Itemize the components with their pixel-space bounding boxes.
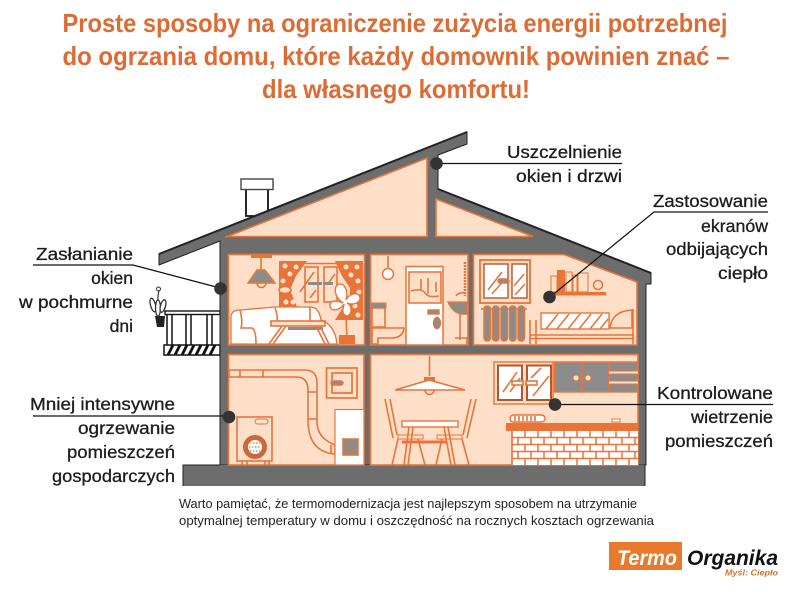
callout: Kontrolowane wietrzenie: pomieszczeń: [665, 431, 773, 451]
callout: Mniej intensywne: gospodarczych: [52, 466, 175, 486]
logo: TermoOrganika: [609, 542, 778, 578]
house shell: [159, 132, 651, 486]
icon: sink: [448, 262, 467, 345]
title: dla własnego komfortu!: [262, 74, 530, 104]
panel: attic right: [436, 199, 533, 236]
icon: pendant lamp: [395, 356, 465, 394]
icon: wall vent: [326, 368, 357, 398]
callout: Mniej intensywne: ogrzewanie: [78, 418, 175, 438]
callout: Zastosowanie ekranów: ciepło: [718, 263, 768, 283]
icon: radiator: [481, 306, 527, 341]
icon: bedroom window: [480, 260, 530, 303]
callout: Kontrolowane wietrzenie: Kontrolowane: [657, 383, 773, 403]
title: [62, 8, 730, 104]
callout: Mniej intensywne: Mniej intensywne: [30, 394, 175, 414]
logo: TermoOrganika: Myśl: Ciepło: [725, 568, 778, 578]
icon: balcony with plant: [149, 287, 220, 355]
callout: Kontrolowane wietrzenie: [549, 383, 773, 451]
callout: Zastosowanie ekranów: [543, 191, 768, 303]
panel: bathroom: [370, 254, 468, 345]
icon: kitchen cabinets: [554, 362, 638, 392]
icon: sofa: [231, 307, 337, 344]
callout: Zasłanianie okien: w pochmurne: [18, 292, 133, 312]
icon: ceiling lamp: [248, 256, 275, 288]
icon: ventilation duct: [229, 370, 335, 454]
icon: kitchen window: [494, 362, 553, 404]
title: do ogrzania domu, które każdy domownik powinien znać –: [62, 41, 730, 71]
callout: Uszczelnienie: [430, 142, 622, 186]
callout: Kontrolowane wietrzenie: wietrzenie: [690, 407, 773, 427]
icon: boiler cabinet: [335, 410, 364, 465]
icon: heat pump: [237, 417, 272, 465]
note text: Warto pamiętać, że termomodernizacja jest najlepszym sposobem na utrzymanie: [179, 497, 637, 511]
icon: bed: [530, 309, 634, 344]
icon: bulb: [382, 256, 394, 280]
callout: Zastosowanie ekranów: ekranów: [701, 216, 768, 236]
icon: brick counter: [506, 415, 638, 465]
icon: toilet: [371, 303, 404, 344]
callout: Mniej intensywne: pomieszczeń: [67, 442, 175, 462]
icon: shelf with books: [551, 270, 606, 296]
icon: window and curtains: [279, 261, 363, 320]
callout: Zasłanianie okien: Zasłanianie: [36, 244, 133, 264]
panel: attic left: [226, 158, 427, 237]
callout: Zastosowanie ekranów: odbijających: [666, 239, 768, 259]
icon: chimney: [241, 179, 273, 216]
title: Proste sposoby na ograniczenie zużycia energii potrzebnej: [62, 8, 728, 38]
callout: Zasłanianie okien: okien: [91, 268, 133, 288]
callout: Zasłanianie okien: [18, 244, 227, 336]
panel: utility room: [228, 354, 364, 465]
icon: dining table and chairs: [385, 399, 476, 465]
panel: bedroom: [474, 254, 637, 345]
note text: [179, 497, 654, 528]
logo: TermoOrganika: Termo: [617, 547, 677, 570]
note text: optymalnej temperatury w domu i oszczędność na rocznych kosztach ogrzewania: [179, 514, 654, 528]
callout: Zasłanianie okien: dni: [110, 316, 133, 336]
panel: living room: [228, 254, 364, 345]
logo: TermoOrganika: Organika: [687, 547, 778, 570]
icon: coffee table: [269, 321, 329, 344]
callout: Uszczelnienie: okien i drzwi: [516, 166, 622, 186]
panel: kitchen dining: [370, 354, 638, 465]
callout: Mniej intensywne: [30, 394, 235, 486]
callout: Uszczelnienie: Uszczelnienie: [507, 142, 622, 162]
icon: potted plant: [330, 284, 360, 344]
icon: door: [406, 266, 443, 345]
callout: Zastosowanie ekranów: Zastosowanie: [653, 191, 768, 211]
